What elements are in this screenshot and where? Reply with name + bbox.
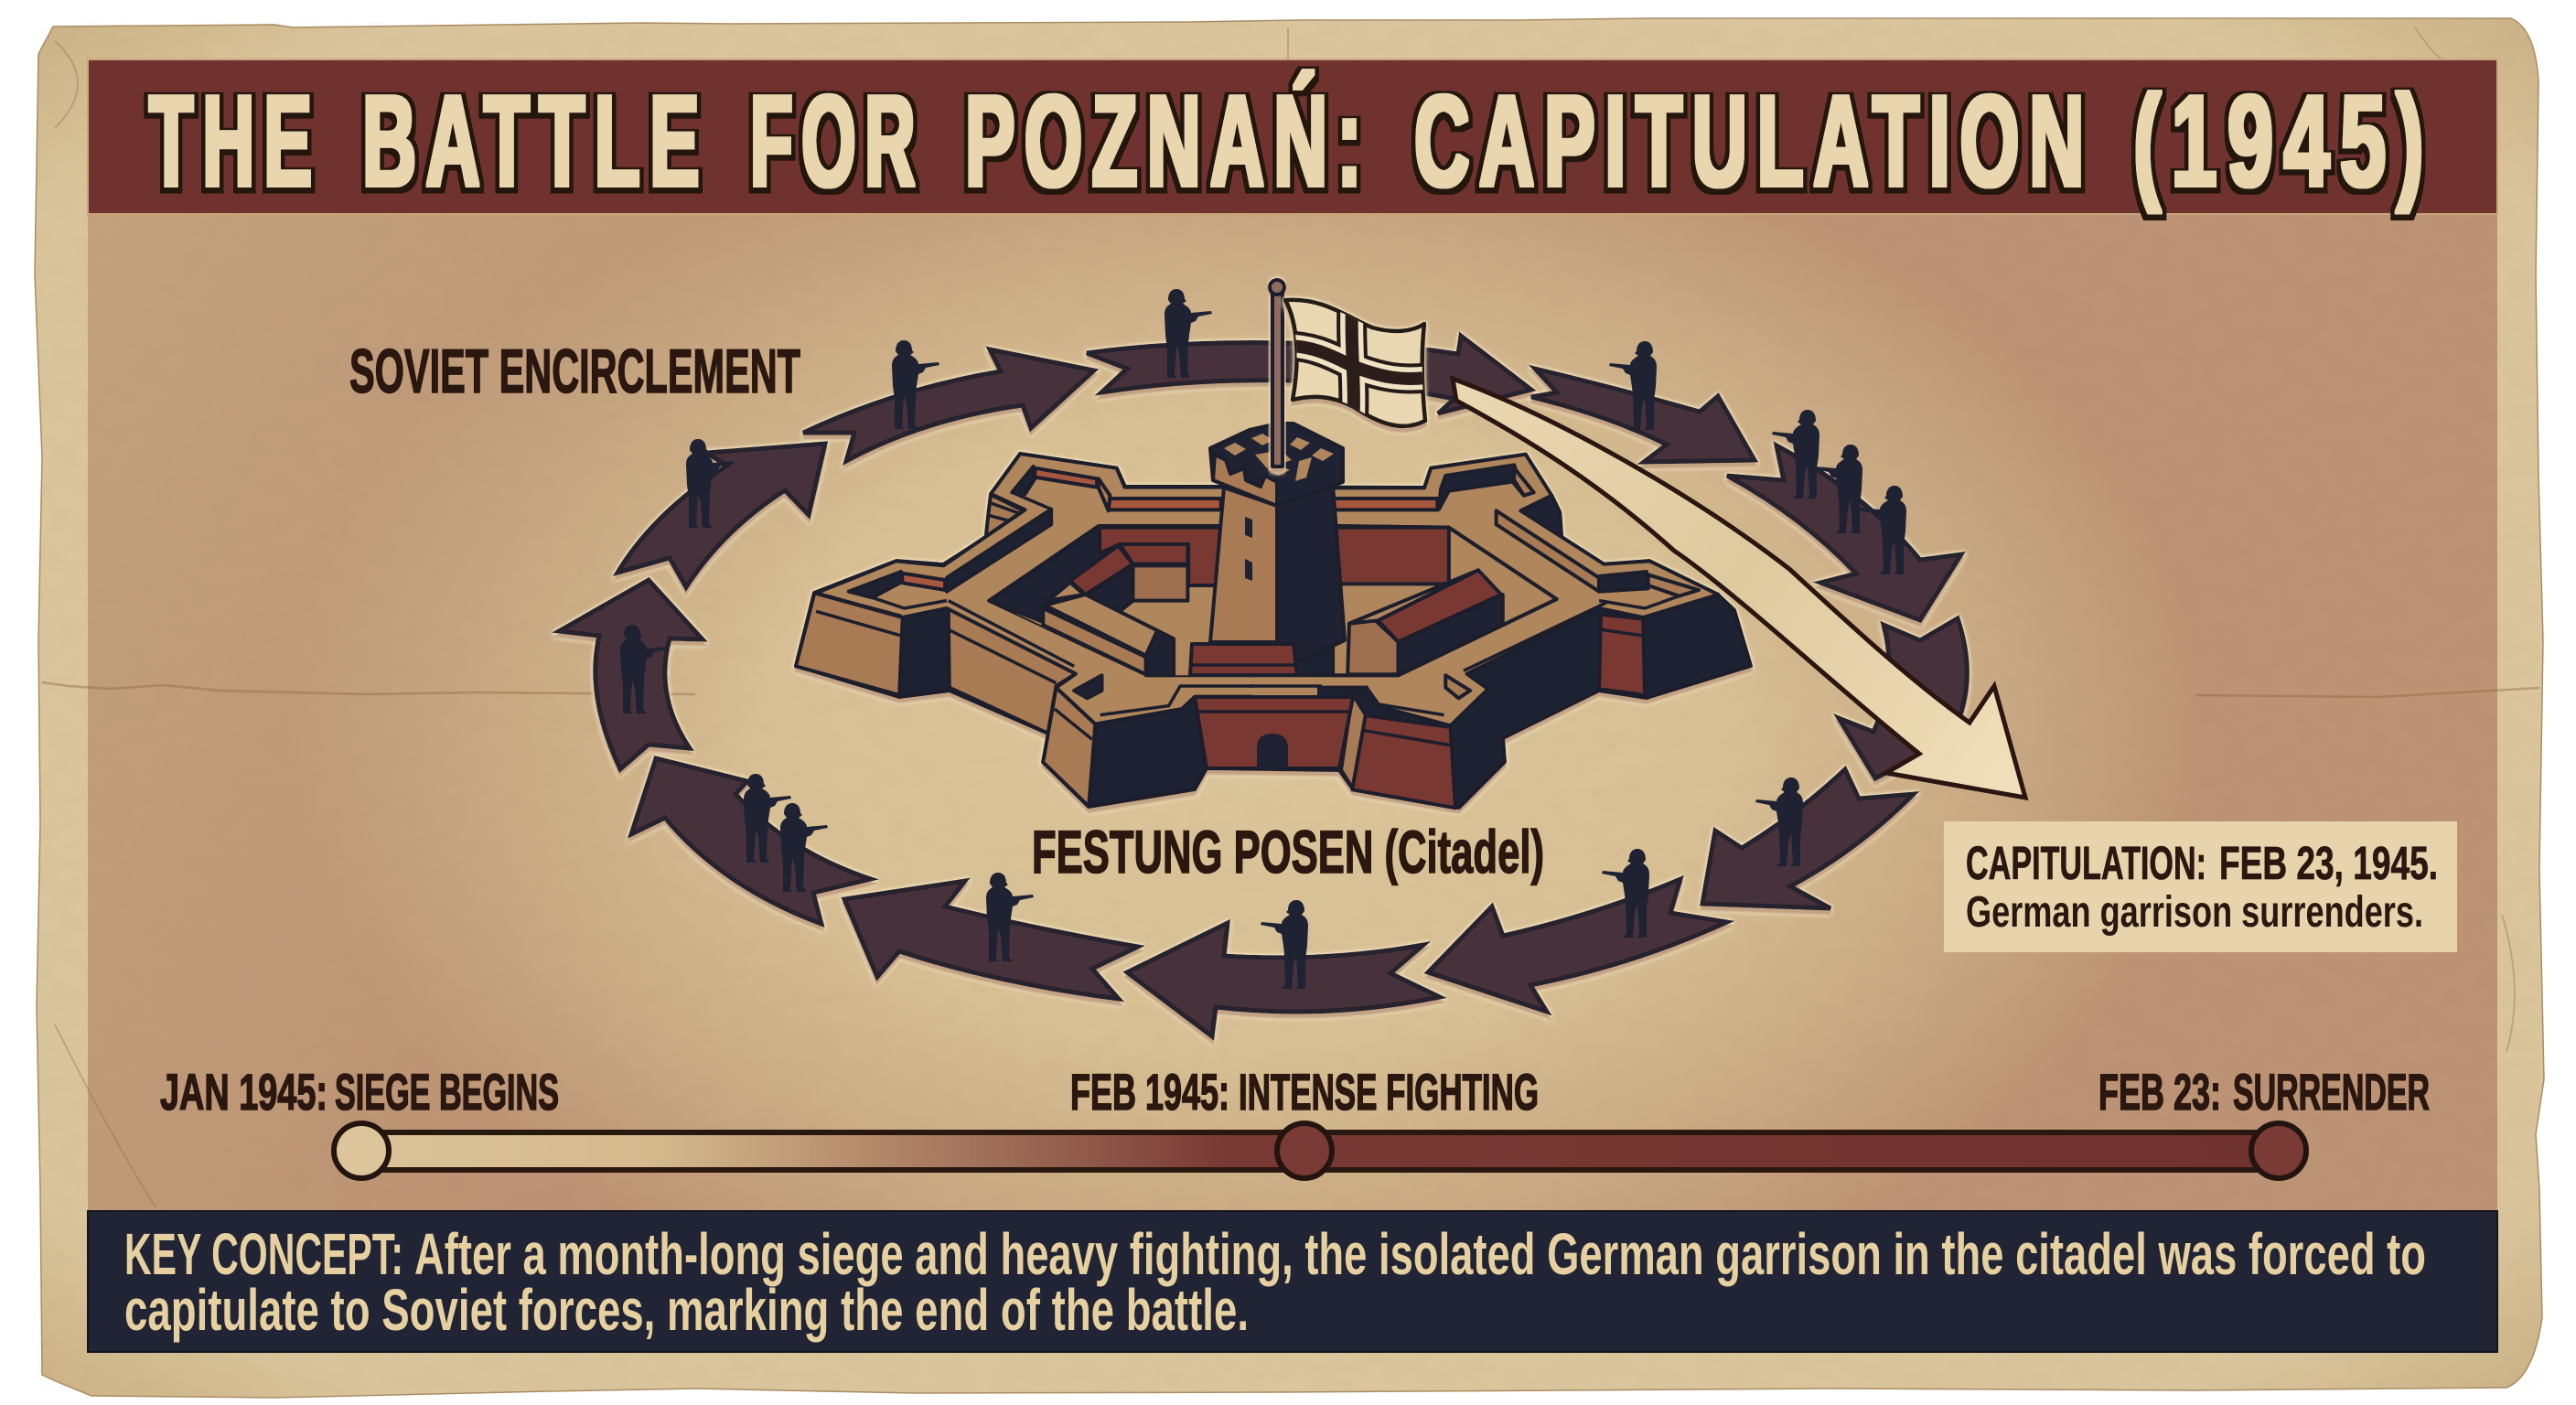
panel tan wash xyxy=(88,214,2497,1211)
title: POZNAŃ: xyxy=(965,69,1371,214)
timeline label: intense fighting: INTENSE FIGHTING xyxy=(1239,1063,1539,1121)
arrow: east upper xyxy=(1727,445,1961,620)
key concept panel: KEY CONCEPT: xyxy=(124,1221,403,1287)
arrow: south-east xyxy=(1702,769,1914,908)
title: FOR xyxy=(750,69,924,214)
star fortress citadel xyxy=(88,280,2497,1352)
title: CAPITULATION xyxy=(1414,69,2094,214)
soldier xyxy=(1772,410,1819,499)
soldier xyxy=(620,625,668,713)
soldier xyxy=(780,803,828,892)
key concept panel: capitulate to Soviet forces, marking the end of the battle. xyxy=(124,1277,1249,1343)
rampart walkway left xyxy=(816,454,1309,724)
soldier xyxy=(986,873,1034,961)
central tower xyxy=(1190,424,1345,675)
title: BATTLE xyxy=(362,69,709,214)
right half of fortress xyxy=(1261,455,1718,808)
marker: January xyxy=(334,1123,389,1178)
soldier xyxy=(1859,486,1906,574)
timeline label: intense fighting: FEB 1945: xyxy=(1070,1063,1229,1121)
gatehouse xyxy=(1195,697,1353,768)
horizontal fold crease xyxy=(42,682,2539,697)
arrow: north xyxy=(1087,336,1531,413)
title: THE xyxy=(149,69,321,214)
timeline label: siege begins: JAN 1945: xyxy=(160,1063,327,1121)
marker: February xyxy=(1277,1123,1332,1178)
capitulation callout: German garrison surrenders. xyxy=(1966,888,2423,937)
soldier xyxy=(1261,900,1308,989)
timeline label: surrender: SURRENDER xyxy=(2233,1063,2430,1121)
soviet encirclement label: SOVIET ENCIRCLEMENT xyxy=(349,337,800,406)
soldier xyxy=(686,439,734,528)
arrow: south xyxy=(1127,923,1440,1036)
arrow: west xyxy=(559,580,703,769)
soldier xyxy=(892,340,939,429)
tower battlements xyxy=(1210,424,1343,506)
timeline label: siege begins: SIEGE BEGINS xyxy=(335,1063,559,1121)
arrow: south-east lower xyxy=(1428,879,1727,1012)
title banner xyxy=(88,59,2497,214)
capitulation callout: CAPITULATION: xyxy=(1966,837,2206,889)
citadel label: FESTUNG POSEN (Citadel) xyxy=(1032,818,1544,885)
capitulation arrow xyxy=(1453,379,2025,798)
soldier xyxy=(1755,778,1803,866)
arrow: north-west upper xyxy=(803,349,1094,461)
soldier xyxy=(744,774,791,863)
fortress silhouette xyxy=(796,454,1751,808)
right barracks xyxy=(1347,570,1503,674)
arrow: south-west xyxy=(844,881,1138,999)
capitulation callout: FEB 23, 1945. xyxy=(2219,837,2438,889)
key concept panel xyxy=(88,1211,2497,1352)
timeline xyxy=(160,1063,2430,1178)
arrow: north-west lower xyxy=(617,444,825,587)
soldier xyxy=(1609,341,1657,430)
left barracks xyxy=(1043,544,1187,675)
soldier xyxy=(1602,849,1649,938)
soldier xyxy=(1165,289,1212,378)
encirclement arrow ring xyxy=(559,336,1967,1036)
timeline bar xyxy=(361,1132,2279,1170)
soldiers encircling the citadel xyxy=(620,289,1906,989)
rampart front walkway join xyxy=(1244,675,1322,697)
flagpole xyxy=(1270,280,1284,467)
left courtyard xyxy=(989,526,1224,675)
left half of fortress xyxy=(796,454,1309,807)
right courtyard xyxy=(1333,526,1557,675)
marker: February 23 xyxy=(2251,1123,2306,1178)
rampart walkway right xyxy=(1261,455,1718,725)
main panel background xyxy=(88,214,2497,1211)
arrow: east xyxy=(1839,618,1967,778)
timeline label: surrender: FEB 23: xyxy=(2098,1063,2221,1121)
arrow: south-west upper xyxy=(631,758,871,924)
soldier xyxy=(1815,445,1862,533)
capitulation callout xyxy=(1944,821,2457,952)
flag with cross xyxy=(1285,300,1427,426)
arrow: north-east xyxy=(1531,369,1755,462)
